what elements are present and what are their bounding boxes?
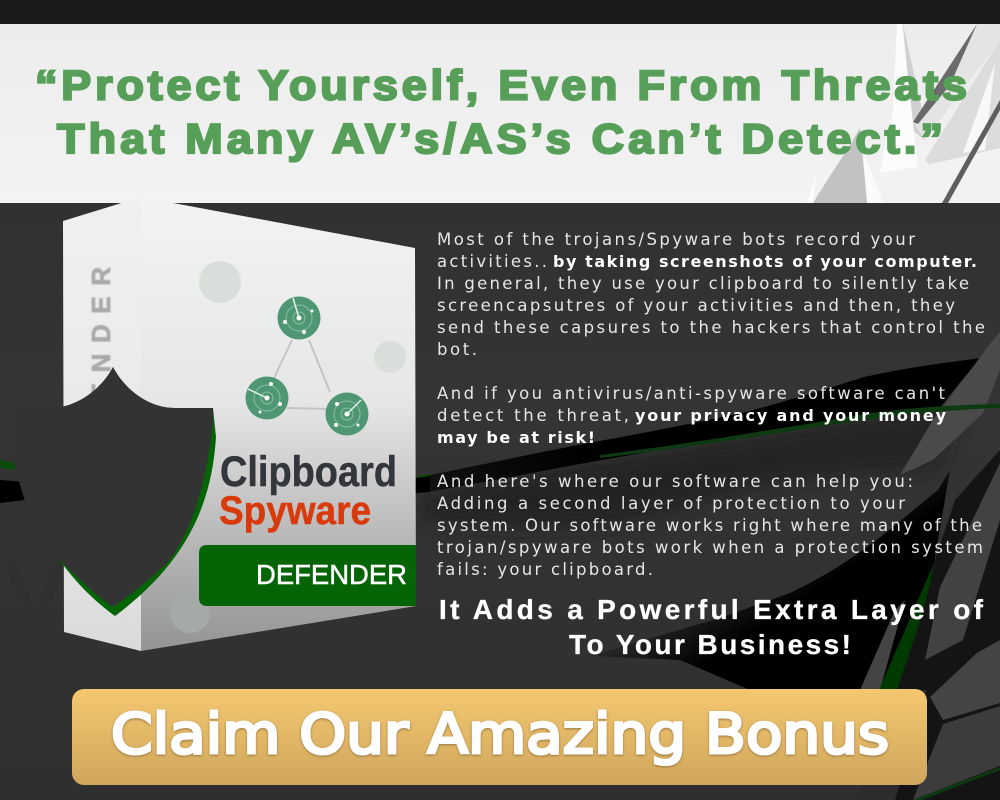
body copy [437,230,985,579]
subheading: To Your Business! [569,629,851,660]
paragraph 3 [437,472,983,579]
paragraph 1: screencapsutres of your activities and then, they [437,296,955,315]
call to action button [72,689,927,785]
paragraph 3: Adding a second layer of protection to your [437,494,905,513]
title: “Protect Yourself, Even From Threats [35,63,967,109]
paragraph 1: activities.. [437,252,547,271]
radar icon top [278,296,320,340]
paragraph 1: bot. [437,340,477,359]
green label [199,545,416,606]
box front [141,197,416,651]
green streaks [0,404,1000,800]
faded radar circles [170,261,406,633]
paragraph 2: And if you antivirus/anti-spyware software can't [437,384,946,403]
paragraph 2: detect the threat, [437,406,629,425]
paragraph 3: fails: your clipboard. [437,560,653,579]
paragraph 2 [437,384,947,447]
paragraph 2: may be at risk! [437,428,595,447]
paragraph 2: your privacy and your money [635,406,947,425]
radar icon right [326,392,368,436]
call to action button: Claim Our Amazing Bonus [111,702,889,766]
box text: Clipboard: Clipboard [220,448,397,496]
header shards [807,24,1000,203]
paragraph 1: by taking screenshots of your computer. [553,252,977,271]
dark swooshes [0,332,1000,800]
product box [63,197,416,651]
radar network links [274,340,330,409]
shield icon [13,367,216,616]
radar icon left [246,376,288,420]
title: That Many AV’s/AS’s Can’t Detect.” [57,116,943,163]
paragraph 3: system. Our software works right where many of the [437,516,982,535]
box spine label: DEFENDER [86,267,116,484]
header band [0,24,1000,203]
paragraph 3: And here's where our software can help you: [437,472,913,491]
paragraph 1: In general, they use your clipboard to silently take [437,274,969,293]
subheading: It Adds a Powerful Extra Layer of [439,594,984,625]
title [35,63,967,163]
paragraph 1 [437,230,985,359]
subheading [439,594,984,660]
paragraph 3: trojan/spyware bots work when a protection system [437,538,983,557]
paragraph 1: Most of the trojans/Spyware bots record your [437,230,915,249]
top black strip [0,0,1000,24]
box side [63,197,141,651]
green label: DEFENDER [256,559,407,590]
box text: Spyware: Spyware [219,489,371,533]
paragraph 1: send these capsures to the hackers that control the [437,318,985,337]
